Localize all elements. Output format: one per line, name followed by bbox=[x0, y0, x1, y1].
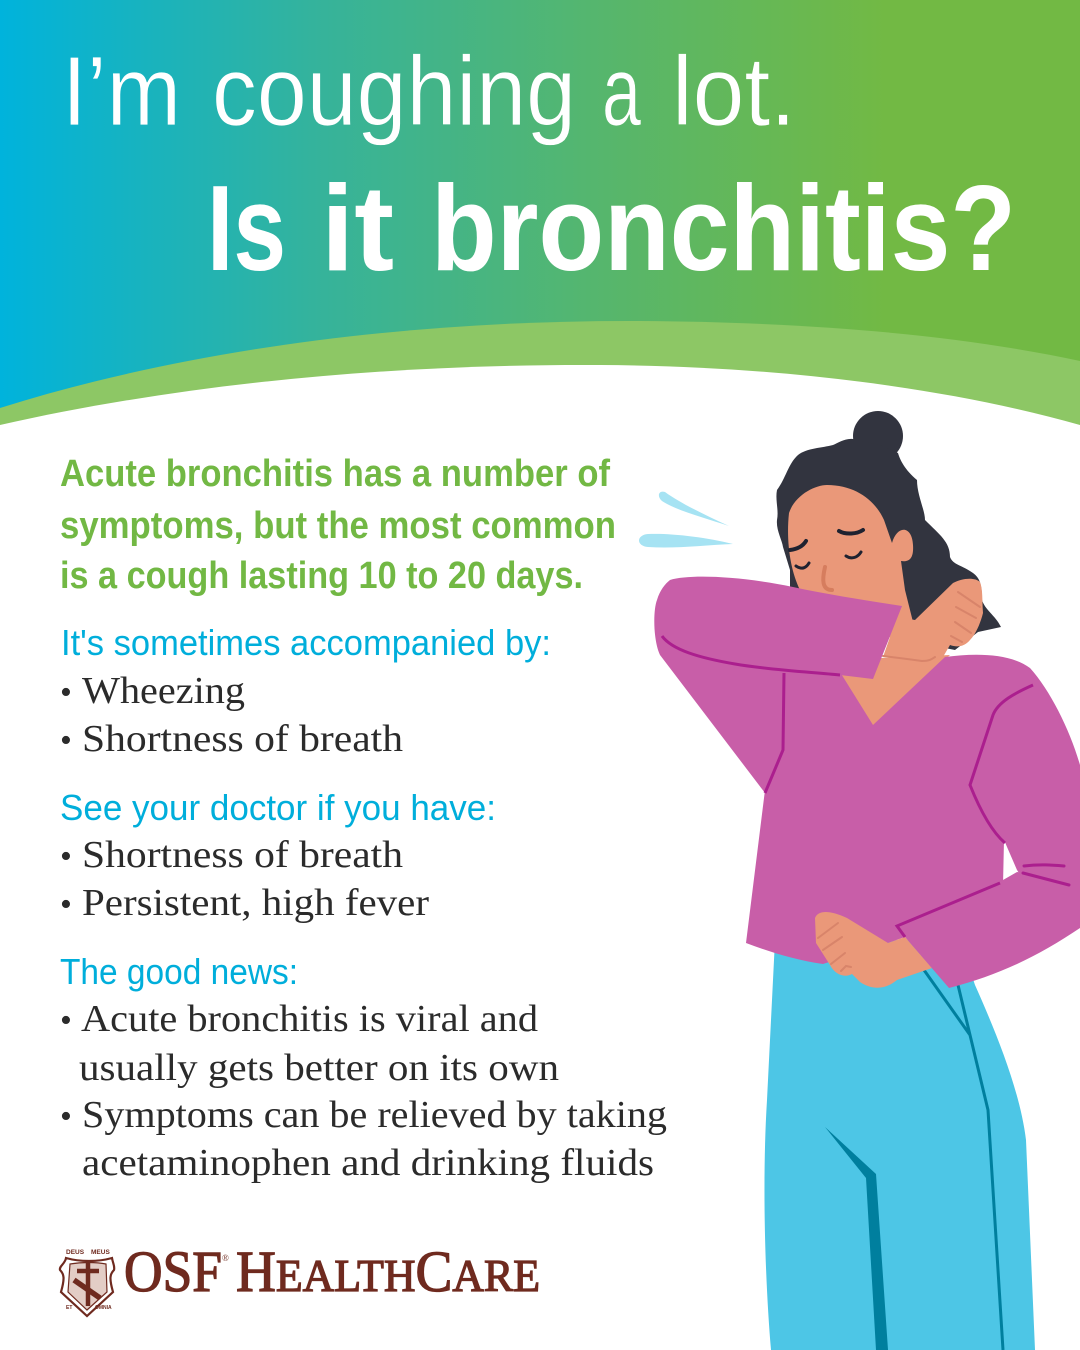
lower arm sleeve bbox=[897, 685, 1080, 988]
logo: OSF HealthCare: HEALTHCARE bbox=[236, 1239, 540, 1304]
title line 2: Is bbox=[207, 160, 286, 296]
title line 2 bbox=[207, 160, 1016, 296]
intro text: is a cough lasting 10 to 20 days. bbox=[60, 555, 583, 597]
logo: OSF HealthCare: ® bbox=[222, 1253, 229, 1263]
section: accompanied by: • bbox=[60, 674, 72, 711]
icon: crest bbox=[60, 1249, 114, 1316]
title line 1 bbox=[62, 36, 796, 146]
section: the good news: usually gets better on its own bbox=[79, 1047, 559, 1089]
section: the good news bbox=[60, 951, 667, 1184]
section: see your doctor: • bbox=[60, 886, 72, 923]
illustration: woman coughing into elbow bbox=[639, 411, 1080, 1350]
section: the good news: • bbox=[60, 1002, 72, 1039]
section: accompanied by: It's sometimes accompanied by: bbox=[61, 622, 551, 663]
icon: crest: OMNIA bbox=[95, 1305, 112, 1311]
section: see your doctor: See your doctor if you have: bbox=[60, 787, 496, 828]
hair bbox=[776, 411, 1001, 650]
section: accompanied by: • bbox=[60, 722, 72, 759]
icon: cough droplets bbox=[639, 492, 733, 548]
section: accompanied by bbox=[60, 622, 551, 760]
face bbox=[788, 485, 915, 640]
title line 1: coughing bbox=[212, 36, 576, 146]
section: the good news: • bbox=[60, 1098, 72, 1135]
section: the good news: Symptoms can be relieved by taking bbox=[82, 1094, 667, 1136]
title line 2: bronchitis? bbox=[431, 160, 1016, 296]
logo: OSF HealthCare bbox=[60, 1239, 540, 1316]
section: see your doctor: • bbox=[60, 838, 72, 875]
section: see your doctor: Persistent, high fever bbox=[82, 882, 429, 924]
section: the good news: The good news: bbox=[60, 951, 298, 992]
intro text bbox=[60, 453, 616, 597]
intro text: Acute bronchitis has a number of bbox=[60, 453, 610, 495]
pants bbox=[764, 940, 1035, 1350]
header banner bbox=[0, 0, 1080, 460]
title line 1: a bbox=[602, 36, 641, 146]
icon: crest: ET bbox=[66, 1305, 72, 1311]
section: the good news: acetaminophen and drinking fluids bbox=[82, 1142, 654, 1184]
icon: crest: DEUS bbox=[66, 1249, 85, 1256]
title line 1: I’m bbox=[62, 36, 181, 146]
torso sweater bbox=[746, 655, 1080, 964]
raised forearm and hand bbox=[883, 579, 983, 662]
title line 1: lot. bbox=[672, 36, 796, 146]
section: accompanied by: Wheezing bbox=[82, 670, 245, 712]
intro text: symptoms, but the most common bbox=[60, 505, 616, 547]
section: accompanied by: Shortness of breath bbox=[82, 718, 403, 760]
icon: crest: MEUS bbox=[91, 1249, 110, 1256]
raised sleeve bbox=[654, 577, 902, 793]
section: see your doctor: Shortness of breath bbox=[82, 834, 403, 876]
lower hand bbox=[815, 912, 932, 988]
wordmark: OSF bbox=[124, 1239, 222, 1304]
section: the good news: Acute bronchitis is viral and bbox=[81, 998, 538, 1040]
title line 2: it bbox=[321, 160, 394, 296]
section: see your doctor bbox=[60, 787, 496, 924]
neck and chest bbox=[835, 655, 950, 726]
